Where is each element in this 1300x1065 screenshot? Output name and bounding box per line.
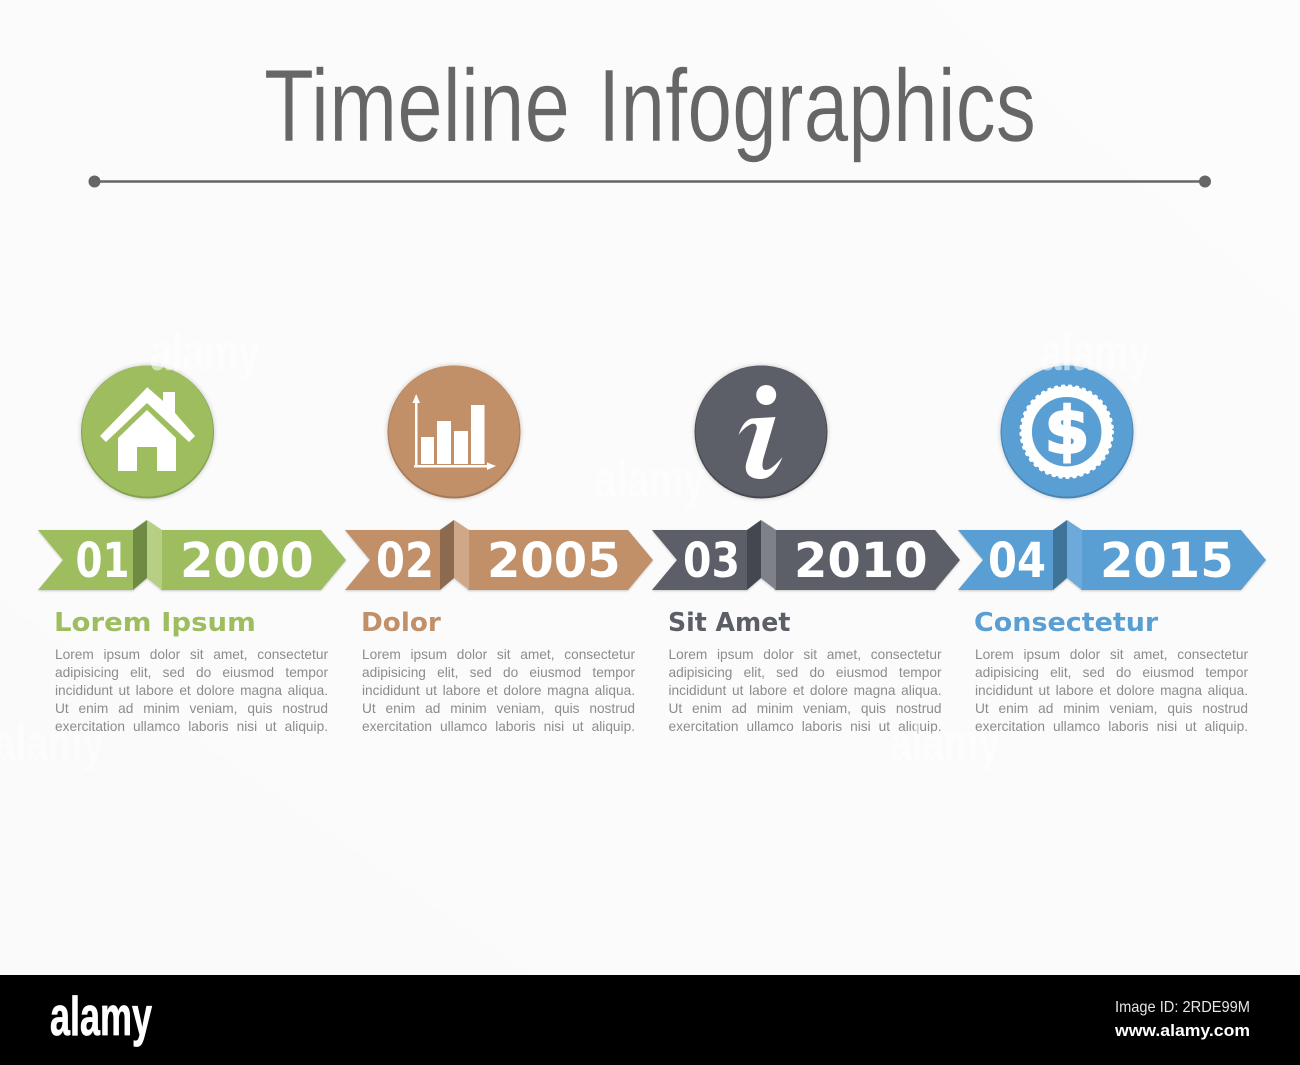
text block: step 02 description: Lorem ipsum dolor sit amet, consectetur — [362, 647, 635, 662]
panel: step 02 — [345, 363, 654, 734]
icon: info in grey circle — [692, 364, 828, 500]
ribbon: 04 2015: 2015 — [1100, 533, 1234, 589]
heading: Dolor: Dolor — [361, 608, 441, 638]
ribbon: 01 2000: 2000 — [180, 533, 314, 589]
text block: step 02 description: Ut enim ad minim veniam, quis nostrud — [362, 701, 635, 716]
icon: dollar coin in blue circle — [999, 364, 1135, 500]
icon: house in green circle — [80, 364, 216, 500]
text block: step 01 description: incididunt ut labore et dolore magna aliqua. — [55, 683, 328, 698]
ribbon: 03 2010: 2010 — [794, 533, 927, 589]
faint alamy watermarks — [0, 324, 1150, 772]
icon: dollar coin in blue circle: $ — [1045, 395, 1089, 469]
text block: step 01 description: Ut enim ad minim veniam, quis nostrud — [55, 701, 328, 716]
text block: step 04 description: Ut enim ad minim veniam, quis nostrud — [975, 701, 1248, 716]
text block: step 02 description: incididunt ut labore et dolore magna aliqua. — [362, 683, 635, 698]
text block: step 04 description: exercitation ullamco laboris nisi ut aliquip. — [975, 719, 1248, 734]
heading: Sit Amet: Sit Amet — [668, 608, 790, 638]
ribbon: 04 2015 — [958, 520, 1266, 590]
panel: step 04 — [958, 363, 1266, 734]
ribbon: 01 2000: 01 — [76, 533, 130, 589]
panel: step 03 — [652, 363, 960, 734]
logo: alamy: alamy — [50, 985, 152, 1047]
text block: step 03 description: exercitation ullamco laboris nisi ut aliquip. — [668, 719, 942, 734]
ribbon: 01 2000 — [38, 520, 346, 590]
panel: step 01 — [38, 363, 346, 734]
text block: step 01 description: adipisicing elit, sed do eiusmod tempor — [55, 665, 328, 680]
text block: step 01 description — [55, 647, 328, 734]
text block: step 04 description: adipisicing elit, sed do eiusmod tempor — [975, 665, 1248, 680]
text block: step 02 description — [362, 647, 635, 734]
title: Infographics — [598, 48, 1036, 163]
text block: step 01 description: exercitation ullamco laboris nisi ut aliquip. — [55, 719, 328, 734]
text block: step 01 description: Lorem ipsum dolor sit amet, consectetur — [55, 647, 328, 662]
faint alamy watermarks: alamy — [595, 451, 705, 509]
faint alamy watermarks: alamy — [890, 714, 1000, 772]
faint alamy watermarks: alamy — [150, 324, 260, 382]
ribbon: 02 2005 — [345, 520, 653, 590]
heading: Lorem Ipsum: Lorem Ipsum — [54, 608, 256, 638]
title — [264, 48, 1036, 163]
text block: step 04 description: Lorem ipsum dolor sit amet, consectetur — [975, 647, 1248, 662]
ribbon: 02 2005: 2005 — [487, 533, 621, 589]
footer bar with logo and image ID — [0, 975, 1300, 1065]
text block: step 03 description: adipisicing elit, sed do eiusmod tempor — [668, 665, 942, 680]
text block: step 02 description: exercitation ullamco laboris nisi ut aliquip. — [362, 719, 635, 734]
title divider line with end dots — [88, 176, 1211, 188]
faint alamy watermarks: alamy — [1040, 324, 1150, 382]
heading: Consectetur: Consectetur — [974, 608, 1158, 638]
text block: step 04 description: incididunt ut labore et dolore magna aliqua. — [975, 683, 1248, 698]
text block: step 03 description — [668, 647, 942, 734]
ribbon: 02 2005: 02 — [376, 533, 434, 589]
ribbon: 03 2010 — [652, 520, 960, 590]
title: Timeline — [264, 48, 570, 163]
icon: bar chart in brown circle — [386, 364, 522, 500]
ribbon: 04 2015: 04 — [988, 533, 1046, 589]
text block: step 03 description: Lorem ipsum dolor sit amet, consectetur — [668, 647, 942, 662]
text block: step 03 description: incididunt ut labore et dolore magna aliqua. — [668, 683, 942, 698]
text block: step 02 description: adipisicing elit, sed do eiusmod tempor — [362, 665, 635, 680]
text block: step 04 description — [975, 647, 1248, 734]
website: www.alamy.com — [1114, 1021, 1250, 1040]
image ID: Image ID: 2RDE99M — [1115, 999, 1250, 1016]
ribbon: 03 2010: 03 — [682, 533, 740, 589]
text block: step 03 description: Ut enim ad minim veniam, quis nostrud — [668, 701, 942, 716]
